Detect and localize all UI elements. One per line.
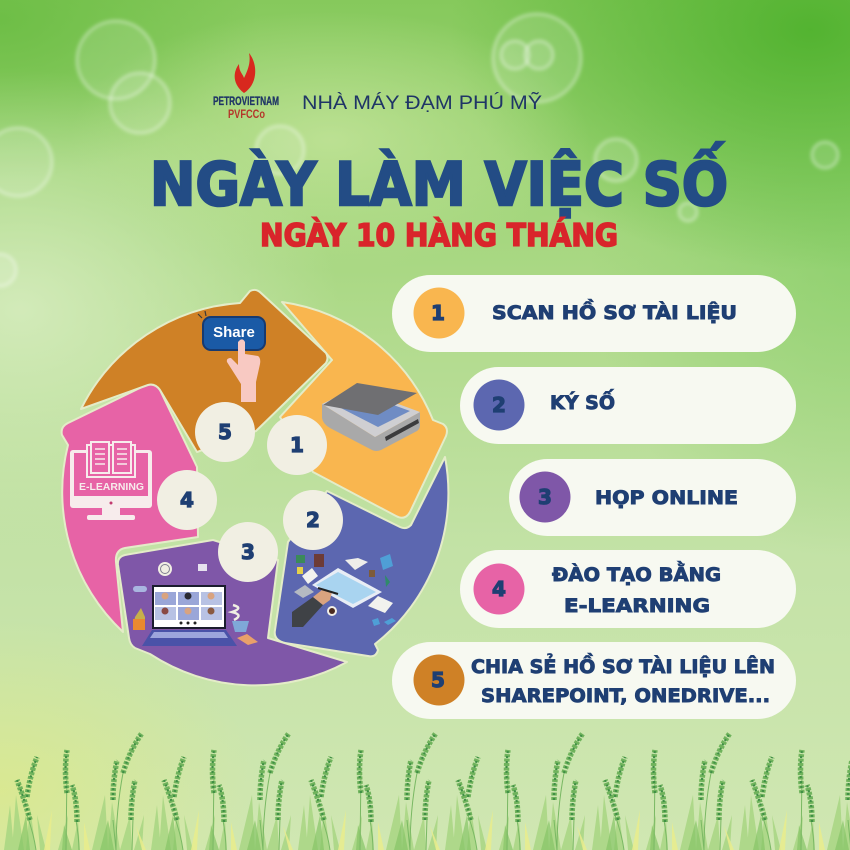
icon: e-learning monitor xyxy=(70,442,152,520)
step 3 pill xyxy=(509,459,796,536)
step 5 pill: SHAREPOINT, ONEDRIVE... xyxy=(481,685,770,707)
step 5 pill: 5 xyxy=(431,668,445,692)
segment 1: orange xyxy=(280,302,447,518)
step 3 pill: HỌP ONLINE xyxy=(595,487,738,509)
step 4 pill: ĐÀO TẠO BẰNG xyxy=(552,560,721,586)
segment 5: brown xyxy=(81,290,328,452)
number circle 5 xyxy=(195,402,255,462)
title: NGÀY LÀM VIỆC SỐ xyxy=(150,141,728,220)
rice grass border xyxy=(4,733,850,850)
icon: share button with hand: Share xyxy=(213,324,255,341)
step 4 pill: E-LEARNING xyxy=(564,595,710,617)
icon: e-learning monitor: E-LEARNING xyxy=(79,481,144,493)
pinwheel diagram xyxy=(62,290,448,685)
step 1 pill xyxy=(392,275,796,352)
logo: Petrovietnam PVFCCo xyxy=(213,53,279,121)
segment 2: blue xyxy=(275,457,448,656)
step 5 pill xyxy=(392,642,796,719)
step 2 pill: KÝ SỐ xyxy=(550,388,615,414)
segment 4: pink xyxy=(62,384,198,632)
number circle 1 xyxy=(267,415,327,475)
step 4 pill: 4 xyxy=(492,577,506,601)
number circle 4 xyxy=(157,470,217,530)
icon: digital signing scene xyxy=(292,554,396,627)
number circle 5: 5 xyxy=(218,420,232,444)
icon: share button with hand xyxy=(198,311,265,402)
subtitle: NGÀY 10 HÀNG THÁNG xyxy=(260,218,618,254)
step 4 pill xyxy=(460,550,796,628)
number circle 3 xyxy=(218,522,278,582)
number circle 4: 4 xyxy=(180,488,194,512)
step 5 pill: CHIA SẺ HỒ SƠ TÀI LIỆU LÊN xyxy=(471,652,775,678)
step 1 pill: 1 xyxy=(431,301,445,325)
step 1 pill: SCAN HỒ SƠ TÀI LIỆU xyxy=(492,298,737,324)
step 2 pill: 2 xyxy=(492,393,506,417)
logo: Petrovietnam PVFCCo: PVFCCo xyxy=(228,107,265,121)
step 2 pill xyxy=(460,367,796,444)
step 3 pill: 3 xyxy=(538,485,552,509)
segment 3: purple xyxy=(118,540,347,685)
icon: scanner xyxy=(322,383,420,451)
background bubbles xyxy=(0,14,838,286)
number circle 3: 3 xyxy=(241,540,255,564)
icon: online meeting laptop xyxy=(133,562,258,646)
company name: NHÀ MÁY ĐẠM PHÚ MỸ xyxy=(302,92,542,114)
number circle 1: 1 xyxy=(290,433,304,457)
number circle 2 xyxy=(283,490,343,550)
number circle 2: 2 xyxy=(306,508,320,532)
logo: Petrovietnam PVFCCo: PETROVIETNAM xyxy=(213,94,279,108)
